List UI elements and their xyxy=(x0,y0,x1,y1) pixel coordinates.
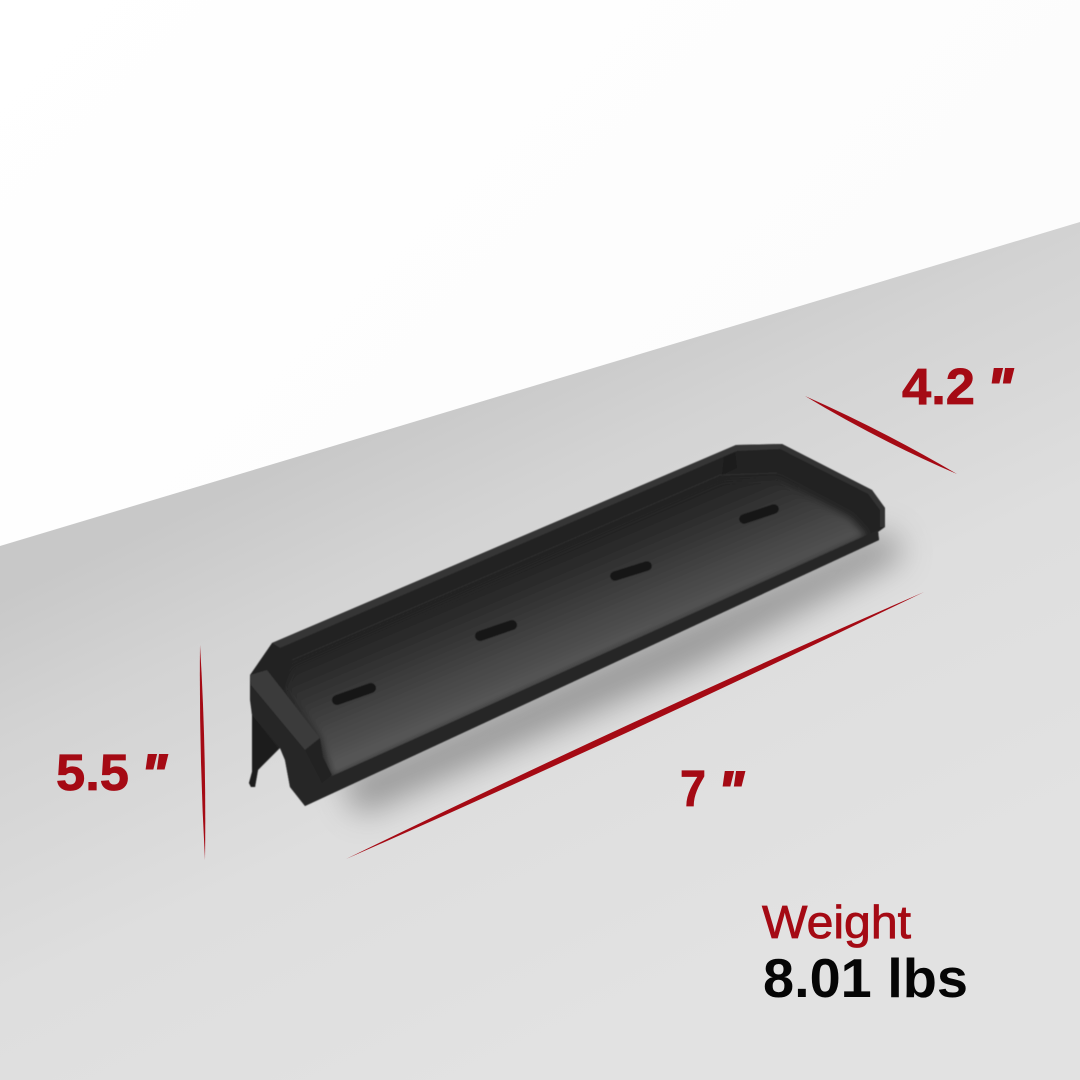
weight value: 8.01 lbs xyxy=(763,947,968,1009)
tray floor xyxy=(284,478,866,778)
tray silhouette xyxy=(249,444,885,806)
weight heading: Weight xyxy=(762,896,911,948)
top back rim xyxy=(272,444,782,648)
back wall ledge xyxy=(292,473,777,660)
slot 1 xyxy=(337,688,371,700)
back corner notch xyxy=(722,450,737,475)
front lip xyxy=(305,530,879,806)
height dimension line xyxy=(200,645,205,860)
rim notch xyxy=(305,738,332,783)
left inner corner xyxy=(267,648,292,690)
label: 7 inches xyxy=(680,760,745,821)
label: 5.5 inches xyxy=(56,744,168,804)
tray shadow xyxy=(340,530,905,815)
depth dimension line xyxy=(805,396,957,474)
mounting leg xyxy=(249,715,278,787)
right corner rim xyxy=(780,444,885,527)
left end face xyxy=(250,683,332,806)
tray product xyxy=(249,444,885,806)
length dimension line xyxy=(346,592,924,859)
label: 5.5 inches: " xyxy=(141,744,168,804)
label: 7 inches: 7 xyxy=(680,760,706,817)
background surface xyxy=(0,222,1080,1080)
label: 7 inches: " xyxy=(718,761,745,821)
left end rim xyxy=(250,670,320,750)
slot 4 xyxy=(744,509,774,519)
label: 4.2 inches: " xyxy=(987,358,1014,418)
label: 4.2 inches: 4.2 xyxy=(902,358,975,415)
label: 5.5 inches: 5.5 xyxy=(56,744,129,801)
slot 3 xyxy=(615,566,647,576)
label: 4.2 inches xyxy=(902,358,1014,418)
slot 2 xyxy=(480,625,512,636)
